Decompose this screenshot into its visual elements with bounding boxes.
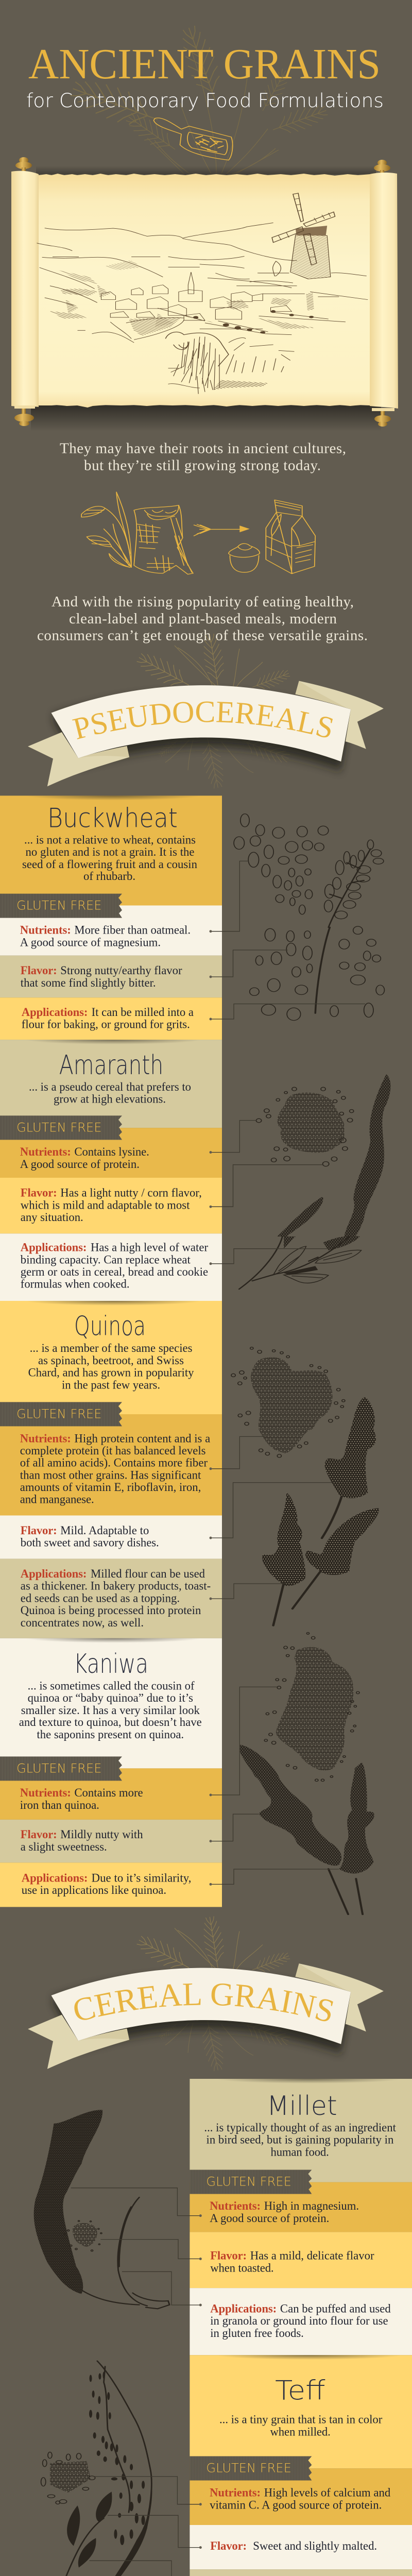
- scroll rollers: [11, 171, 39, 407]
- quinoa flavor: Mild. Adaptable to: [60, 1524, 149, 1537]
- millet flavor: when toasted.: [210, 2261, 274, 2274]
- illustration: parchment scroll: [11, 157, 398, 431]
- intro text 2: clean-label and plant-based meals, modern: [69, 611, 337, 627]
- buckwheat flavor: [21, 964, 182, 989]
- buckwheat description: ... is not a relative to wheat, contains: [24, 833, 196, 846]
- kaniwa description: quinoa or “baby quinoa” due to it’s: [28, 1691, 193, 1704]
- connector lines: amaranth: [209, 1121, 327, 1265]
- gluten free tag: [0, 1402, 122, 1426]
- amaranth nutrients: [20, 1145, 149, 1171]
- quinoa flavor: [21, 1524, 159, 1549]
- kaniwa applications: Due to it’s similarity,: [92, 1871, 191, 1884]
- amaranth description: [29, 1080, 191, 1106]
- illustration: buckwheat seeds and branch: [234, 814, 384, 1021]
- gluten free tag: [190, 2456, 312, 2480]
- heading: quinoa: Quinoa: [74, 1311, 146, 1342]
- banner: pseudocereals: PSEUDOCEREALS: [72, 702, 333, 739]
- scroll paper: [39, 174, 370, 408]
- intro text: They may have their roots in ancient cultures,: [60, 440, 346, 456]
- intro text: but they’re still growing strong today.: [84, 457, 321, 474]
- panel: millet: [190, 2079, 412, 2355]
- gluten free tag: GLUTEN FREE: [16, 899, 102, 913]
- quinoa flavor: both sweet and savory dishes.: [21, 1536, 159, 1549]
- amaranth flavor: which is mild and adaptable to most: [21, 1198, 190, 1211]
- millet applications: Can be puffed and used: [280, 2302, 391, 2315]
- village: [101, 272, 291, 320]
- millet applications: in gluten free foods.: [210, 2327, 304, 2340]
- millet applications: in granola or ground into flour for use: [210, 2314, 388, 2327]
- buckwheat nutrients: Nutrients:: [20, 924, 71, 937]
- amaranth nutrients: Contains lysine.: [74, 1145, 149, 1158]
- windmill: [259, 193, 367, 279]
- kaniwa nutrients: iron than quinoa.: [20, 1799, 99, 1811]
- teff nutrients: Nutrients:: [210, 2486, 261, 2499]
- kaniwa description: ... is sometimes called the cousin of: [28, 1679, 195, 1692]
- quinoa description: [28, 1342, 194, 1391]
- teff description: ... is a tiny grain that is tan in color: [219, 2413, 383, 2426]
- kaniwa applications: Applications:: [22, 1871, 88, 1884]
- amaranth applications: [21, 1241, 208, 1290]
- kaniwa nutrients: Nutrients:: [20, 1786, 71, 1799]
- buckwheat nutrients: More fiber than oatmeal.: [74, 924, 191, 937]
- teff description: when milled.: [270, 2425, 331, 2438]
- millet flavor: Flavor:: [210, 2249, 247, 2262]
- heading: amaranth: Amaranth: [59, 1050, 163, 1081]
- quinoa nutrients: [20, 1432, 210, 1505]
- gluten free tag: GLUTEN FREE: [206, 2461, 291, 2475]
- icon: bowl of flour: [229, 544, 260, 572]
- connector lines: teff: [90, 2477, 202, 2576]
- panel: buckwheat: [0, 795, 222, 1040]
- millet applications: Applications:: [210, 2302, 277, 2315]
- wheat sheaf: [165, 332, 294, 394]
- millet flavor: Has a mild, delicate flavor: [250, 2249, 374, 2262]
- connector lines: quinoa: [209, 1436, 332, 1600]
- kaniwa flavor: Mildly nutty with: [60, 1828, 143, 1841]
- amaranth description: grow at high elevations.: [54, 1093, 166, 1106]
- quinoa description: as spinach, beetroot, and Swiss: [38, 1354, 184, 1367]
- kaniwa description: the saponins present on quinoa.: [37, 1728, 184, 1741]
- gluten free tag: GLUTEN FREE: [16, 1761, 102, 1775]
- banner: cereal grains: [28, 1963, 384, 2069]
- arrow: [194, 524, 250, 536]
- gluten free tag: [0, 1756, 122, 1781]
- amaranth applications: formulas when cooked.: [21, 1278, 129, 1290]
- amaranth flavor: Flavor:: [21, 1187, 57, 1199]
- teff nutrients: High levels of calcium and: [264, 2486, 391, 2499]
- amaranth applications: Has a high level of water: [91, 1241, 208, 1254]
- amaranth applications: Applications:: [21, 1241, 87, 1254]
- kaniwa nutrients: [20, 1786, 143, 1811]
- connector lines: kaniwa: [209, 1687, 339, 1886]
- kaniwa flavor: [21, 1828, 143, 1853]
- subtitle: for Contemporary Food Formulations: [26, 90, 384, 112]
- millet description: ... is typically thought of as an ingredient: [204, 2121, 397, 2134]
- panel: kaniwa: [0, 1638, 222, 1907]
- wheat bouquet behind title: [67, 23, 330, 174]
- buckwheat description: seed of a flowering fruit and a cousin: [22, 858, 197, 871]
- buckwheat applications: flour for baking, or ground for grits.: [22, 1018, 190, 1030]
- scroll shadow: [31, 405, 381, 431]
- illustration: quinoa seeds and plant: [231, 1347, 379, 1625]
- buckwheat nutrients: A good source of magnesium.: [20, 936, 161, 948]
- quinoa applications: ed seeds can be used as a topping.: [21, 1591, 180, 1604]
- quinoa applications: Milled flour can be used: [91, 1567, 205, 1580]
- connector lines: millet: [71, 2188, 202, 2306]
- amaranth flavor: any situation.: [21, 1211, 83, 1224]
- quinoa applications: as a thickener. In bakery products, toast-: [21, 1580, 211, 1592]
- panel: quinoa: [0, 1301, 222, 1638]
- buckwheat description: of rhubarb.: [83, 870, 135, 883]
- quinoa nutrients: and manganese.: [20, 1493, 94, 1505]
- amaranth nutrients: A good source of protein.: [20, 1158, 140, 1171]
- quinoa applications: Applications:: [21, 1567, 87, 1580]
- buckwheat applications: Applications:: [22, 1006, 88, 1019]
- millet description: [204, 2121, 397, 2158]
- quinoa applications: Quinoa is being processed into protein: [21, 1604, 201, 1617]
- amaranth applications: binding capacity. Can replace wheat: [21, 1253, 191, 1266]
- quinoa flavor: Flavor:: [21, 1524, 57, 1537]
- amaranth description: ... is a pseudo cereal that prefers to: [29, 1080, 191, 1093]
- kaniwa description: [19, 1679, 202, 1741]
- gluten free tag: GLUTEN FREE: [206, 2174, 291, 2189]
- kaniwa description: smaller size. It has a very similar look: [21, 1704, 200, 1717]
- connector lines: buckwheat: [209, 861, 365, 1020]
- intro text 2: consumers can’t get enough of these versatile grains.: [37, 628, 368, 644]
- buckwheat applications: [22, 1006, 194, 1030]
- teff nutrients: [210, 2486, 391, 2511]
- kaniwa applications: use in applications like quinoa.: [22, 1884, 166, 1896]
- intro text: [60, 440, 346, 474]
- intro text 2: And with the rising popularity of eating healthy,: [52, 594, 354, 610]
- quinoa applications: [21, 1567, 211, 1629]
- millet description: human food.: [271, 2145, 329, 2158]
- panel: amaranth: [0, 1040, 222, 1301]
- heading: millet: Millet: [267, 2091, 337, 2122]
- amaranth applications: germ or oats in cereal, bread and cookie: [21, 1265, 208, 1278]
- banner: pseudocereals: [28, 681, 384, 786]
- illustration: millet head and seeds: [34, 2110, 169, 2309]
- kaniwa applications: [22, 1871, 191, 1896]
- banner: cereal grains: CEREAL GRAINS: [74, 1984, 333, 2022]
- amaranth nutrients: Nutrients:: [20, 1145, 71, 1158]
- quinoa nutrients: amounts of vitamin E, riboflavin, iron,: [20, 1481, 201, 1494]
- millet nutrients: High in magnesium.: [264, 2199, 359, 2212]
- kaniwa nutrients: Contains more: [74, 1786, 143, 1799]
- millet applications: [210, 2302, 391, 2340]
- heading: buckwheat: Buckwheat: [47, 803, 178, 834]
- millet description: in bird seed, but is gaining popularity in: [206, 2133, 393, 2146]
- quinoa description: in the past few years.: [62, 1378, 160, 1391]
- heading: kaniwa: Kaniwa: [74, 1649, 148, 1680]
- quinoa description: ... is a member of the same species: [30, 1342, 193, 1354]
- icons: grain to food flow: [81, 492, 315, 574]
- illustration: teff plant and seeds: [41, 2361, 152, 2576]
- wheat burst: cereal grains: [134, 1916, 292, 2072]
- teff flavor: Sweet and slightly malted.: [253, 2539, 377, 2552]
- title: ANCIENT GRAINS: [28, 40, 381, 88]
- kaniwa flavor: a slight sweetness.: [21, 1840, 107, 1853]
- gluten free tag: [190, 2170, 312, 2194]
- gluten free tag: [0, 894, 122, 918]
- scroll knobs: [14, 157, 391, 427]
- heading: teff: Teff: [275, 2375, 325, 2406]
- icon: grain scoop: [153, 118, 233, 160]
- quinoa nutrients: of all amino acids). Contains more fiber: [20, 1456, 208, 1469]
- quinoa description: Chard, and has grown in popularity: [28, 1366, 194, 1379]
- millet nutrients: A good source of protein.: [210, 2212, 329, 2225]
- buckwheat nutrients: [20, 924, 191, 948]
- buckwheat description: no gluten and is not a grain. It is the: [26, 845, 195, 858]
- quinoa nutrients: Nutrients:: [20, 1432, 71, 1445]
- buckwheat flavor: that some find slightly bitter.: [21, 976, 156, 989]
- quinoa nutrients: than most other grains. Has significant: [20, 1468, 201, 1481]
- kaniwa description: and texture to quinoa, but doesn’t have: [19, 1716, 202, 1728]
- millet nutrients: Nutrients:: [210, 2199, 261, 2212]
- teff description: [219, 2413, 383, 2438]
- quinoa nutrients: High protein content and is a: [74, 1432, 210, 1445]
- buckwheat applications: It can be milled into a: [92, 1006, 194, 1019]
- amaranth flavor: [21, 1187, 202, 1224]
- illustration: kaniwa seeds and plant: [239, 1632, 374, 1914]
- millet nutrients: [210, 2199, 359, 2225]
- amaranth flavor: Has a light nutty / corn flavor,: [60, 1187, 202, 1199]
- icon: grain stalks: [81, 492, 131, 567]
- tree and grass: [259, 261, 367, 276]
- teff nutrients: vitamin C. A good source of protein.: [210, 2498, 382, 2511]
- wheat burst: pseudocereals: [134, 633, 292, 790]
- teff flavor: Flavor:: [210, 2539, 247, 2552]
- quinoa applications: concentrates now, as well.: [21, 1616, 144, 1629]
- buckwheat description: [22, 833, 197, 883]
- sketch: lower fields and sheaf: [50, 308, 346, 394]
- sketch: hills and fields: [37, 193, 368, 327]
- intro text 2: [37, 594, 368, 644]
- panel: teff: [190, 2355, 412, 2576]
- gluten free tag: GLUTEN FREE: [16, 1406, 102, 1421]
- gluten free tag: GLUTEN FREE: [16, 1120, 102, 1134]
- buckwheat flavor: Strong nutty/earthy flavor: [60, 964, 182, 977]
- icon: flour package: [266, 500, 315, 574]
- icon: grain sack: [134, 505, 193, 574]
- gluten free tag: [0, 1115, 122, 1140]
- quinoa nutrients: complete protein (it has balanced levels: [20, 1444, 206, 1457]
- buckwheat flavor: Flavor:: [21, 964, 57, 977]
- millet flavor: [210, 2249, 374, 2274]
- illustration: amaranth seeds and plant: [239, 1074, 390, 1289]
- kaniwa flavor: Flavor:: [21, 1828, 57, 1841]
